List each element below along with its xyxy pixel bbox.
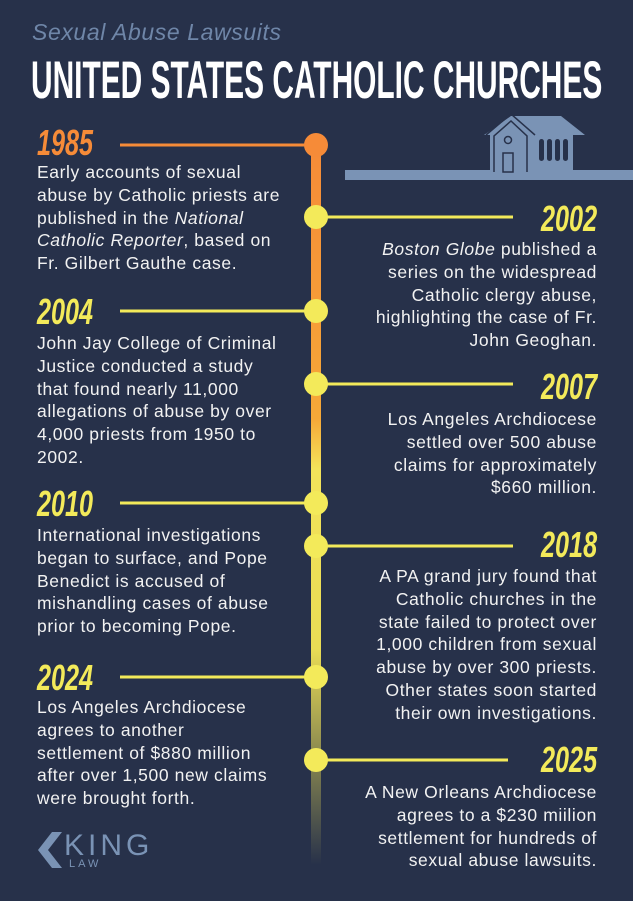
text 1985 <box>37 162 280 273</box>
text 2025: sexual abuse lawsuits. <box>409 850 597 870</box>
year 2018: 2018 <box>541 524 597 565</box>
text 2025: settlement for hundreds of <box>378 828 597 848</box>
text 2007: settled over 500 abuse <box>407 432 597 452</box>
text 2018: abuse by over 300 priests. <box>376 657 597 677</box>
text 2018 <box>376 566 597 723</box>
year 2004: 2004 <box>37 291 93 332</box>
year 2025: 2025 <box>541 739 597 780</box>
text 2004 <box>37 333 277 467</box>
text 2004: 4,000 priests from 1950 to <box>37 424 256 444</box>
logo: King Law: KING <box>64 829 153 862</box>
logo: King Law <box>38 829 153 870</box>
text 2024 <box>37 697 267 808</box>
text 2025: agrees to a $230 miilion <box>397 805 597 825</box>
text 2024: agrees to another <box>37 720 184 740</box>
text 2007 <box>388 409 597 497</box>
year 2002: 2002 <box>541 198 597 239</box>
text 2004: 2002. <box>37 447 84 467</box>
icon: church house <box>345 116 633 180</box>
text 2010: began to surface, and Pope <box>37 548 268 568</box>
text 2010: Benedict is accused of <box>37 571 225 591</box>
text 2004: John Jay College of Criminal <box>37 333 277 353</box>
logo: King Law: LAW <box>69 858 101 870</box>
text 1985: Catholic Reporter, based on <box>37 230 271 250</box>
text 2002: highlighting the case of Fr. <box>376 307 597 327</box>
text 1985: abuse by Catholic priests are <box>37 185 280 205</box>
text 2002: John Geoghan. <box>470 330 597 350</box>
text 2024: after over 1,500 new claims <box>37 765 267 785</box>
text 2007: claims for approximately <box>394 455 597 475</box>
text 2010: mishandling cases of abuse <box>37 593 269 613</box>
text 2024: Los Angeles Archdiocese <box>37 697 246 717</box>
text 2010: prior to becoming Pope. <box>37 616 237 636</box>
text 2024: settlement of $880 million <box>37 743 251 763</box>
text 2024: were brought forth. <box>37 788 195 808</box>
year 2024: 2024 <box>37 657 93 698</box>
text 2002: series on the widespread <box>388 262 597 282</box>
text 2007: Los Angeles Archdiocese <box>388 409 597 429</box>
text 2018: 1,000 children from sexual <box>376 634 597 654</box>
subtitle: Sexual Abuse Lawsuits <box>32 19 282 45</box>
text 2018: their own investigations. <box>395 703 597 723</box>
text 1985: Fr. Gilbert Gauthe case. <box>37 253 237 273</box>
year 2007: 2007 <box>541 366 597 407</box>
text 2010 <box>37 525 269 636</box>
year 2010: 2010 <box>37 483 93 524</box>
text 2004: allegations of abuse by over <box>37 401 272 421</box>
text 2018: A PA grand jury found that <box>379 566 597 586</box>
text 1985: Early accounts of sexual <box>37 162 241 182</box>
text 2004: Justice conducted a study <box>37 356 253 376</box>
text 2002: Catholic clergy abuse, <box>412 285 597 305</box>
text 2025 <box>365 782 597 870</box>
text 2002: Boston Globe published a <box>382 239 597 259</box>
text 2018: state failed to protect over <box>379 612 597 632</box>
text 2018: Catholic churches in the <box>396 589 597 609</box>
text 2025: A New Orleans Archdiocese <box>365 782 597 802</box>
text 2004: that found nearly 11,000 <box>37 379 239 399</box>
text 2018: Other states soon started <box>386 680 597 700</box>
title: UNITED STATES CATHOLIC CHURCHES <box>31 51 602 110</box>
text 2010: International investigations <box>37 525 261 545</box>
year 1985: 1985 <box>37 122 93 163</box>
text 2002 <box>376 239 597 350</box>
text 1985: published in the National <box>37 208 244 228</box>
text 2007: $660 million. <box>491 477 597 497</box>
